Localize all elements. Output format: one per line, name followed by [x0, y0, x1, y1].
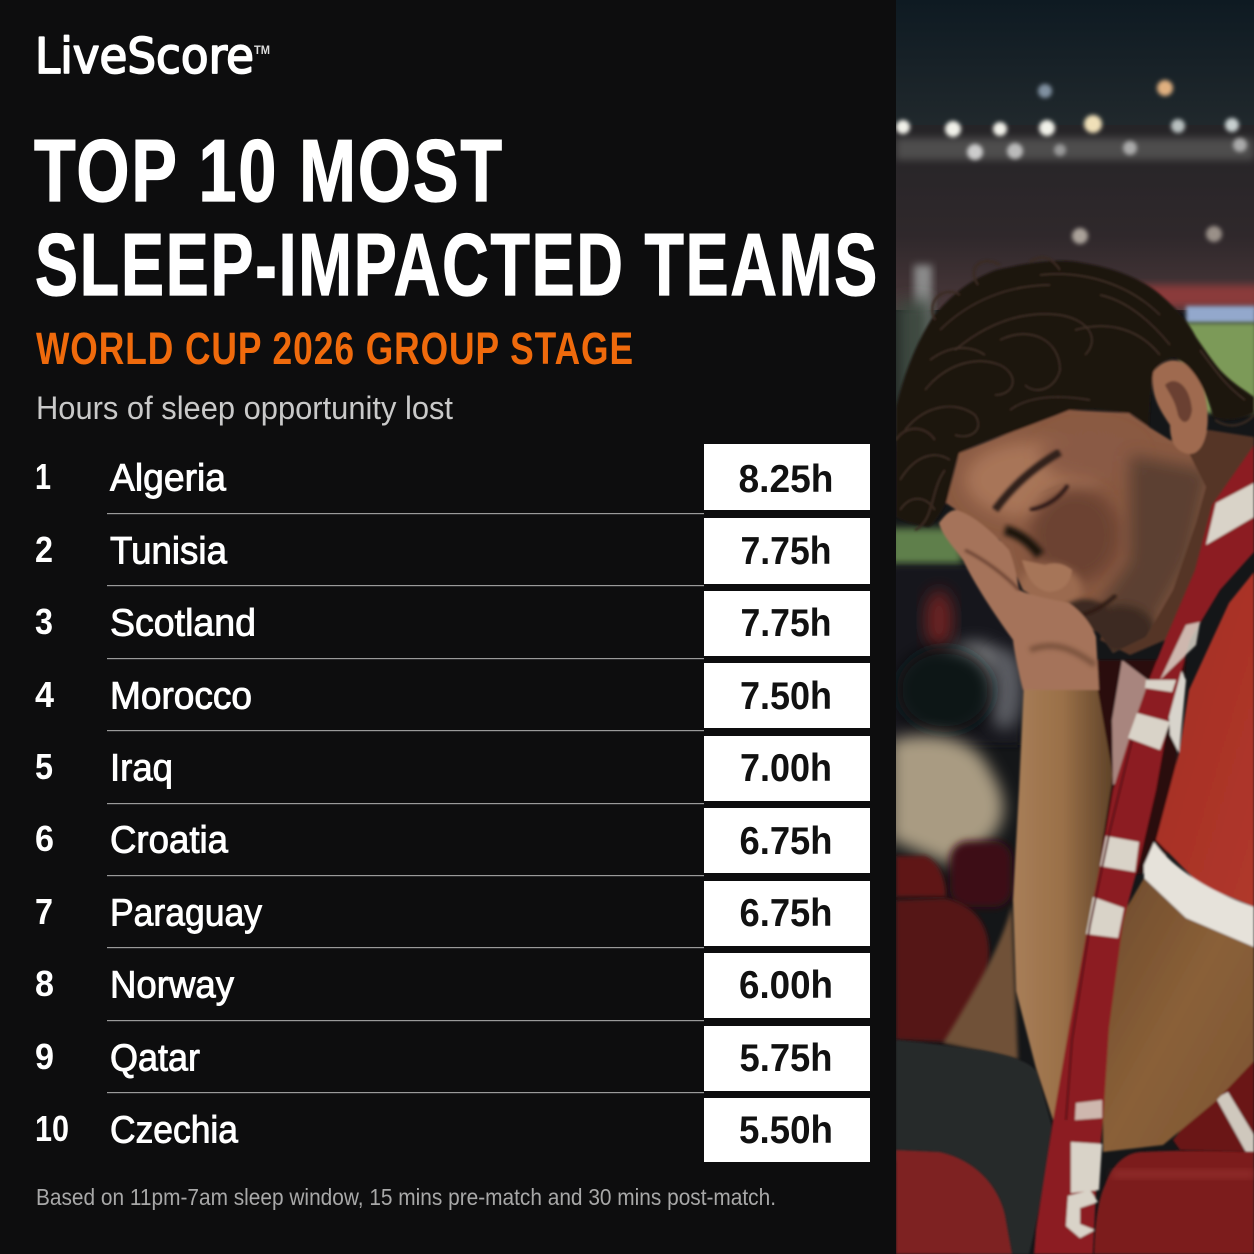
- row 6: Croatia: 6.75h: [740, 820, 832, 863]
- red seats: [950, 841, 1012, 907]
- row 9: Qatar: Qatar: [110, 1038, 200, 1080]
- back scarf strand: [1112, 660, 1148, 785]
- row 3: Scotland: Scotland: [110, 602, 256, 644]
- dark trousers: [896, 1040, 1052, 1254]
- hair: [896, 261, 1254, 527]
- row 9: Qatar: [35, 1026, 870, 1093]
- stadium photo: tired fan: [890, 0, 1254, 1254]
- beige jacket: [890, 735, 1004, 865]
- row 2: Tunisia: [35, 518, 870, 586]
- neck: [1100, 430, 1254, 655]
- row 3: Scotland: 7.75h: [740, 602, 832, 645]
- scarf white stripes: [1066, 483, 1254, 1238]
- row 6: Croatia: [35, 808, 870, 876]
- row 9: Qatar: 5.75h: [740, 1037, 832, 1080]
- row 2: Tunisia: 2: [35, 529, 53, 570]
- background leg: [943, 905, 1018, 1060]
- row 4: Morocco: 4: [35, 674, 54, 715]
- row 1: Algeria: Algeria: [110, 458, 227, 500]
- shadow behind arm and shirt: [1096, 660, 1186, 880]
- row 1: Algeria: [35, 444, 870, 514]
- seat front left: [896, 1150, 1012, 1254]
- row 5: Iraq: 7.00h: [740, 747, 832, 790]
- row 8: Norway: [35, 953, 870, 1021]
- row 7: Paraguay: [35, 881, 870, 948]
- blurred crowd: [896, 560, 965, 571]
- upper arm: [1103, 878, 1254, 1152]
- row 7: Paraguay: 7: [35, 891, 53, 932]
- title: TOP 10 MOST: [34, 121, 504, 220]
- row 4: Morocco: [35, 663, 870, 731]
- row 4: Morocco: Morocco: [110, 676, 252, 718]
- row 8: Norway: Norway: [110, 964, 234, 1006]
- row 1: Algeria: 1: [35, 456, 51, 497]
- row 6: Croatia: 6: [35, 818, 54, 859]
- scarf: [1034, 445, 1254, 1254]
- logo: LiveScore: LiveScore: [35, 28, 254, 85]
- ranking table: [35, 444, 870, 1162]
- footnote: Based on 11pm-7am sleep window, 15 mins pre-match and 30 mins post-match.: [36, 1184, 776, 1210]
- chart caption: Hours of sleep opportunity lost: [36, 390, 453, 426]
- subtitle: WORLD CUP 2026 GROUP STAGE: [36, 323, 634, 374]
- hand: [939, 510, 1099, 690]
- row 5: Iraq: Iraq: [110, 748, 173, 790]
- row 10: Czechia: 5.50h: [739, 1109, 833, 1152]
- seat front right: [1094, 1150, 1254, 1254]
- row 1: Algeria: 8.25h: [738, 458, 834, 501]
- row 6: Croatia: Croatia: [110, 820, 229, 862]
- row 10: Czechia: 10: [35, 1108, 69, 1149]
- row 2: Tunisia: 7.75h: [740, 530, 832, 573]
- fan figure: [896, 257, 1254, 1254]
- logo: LiveScore: TM: [254, 43, 270, 57]
- row 3: Scotland: 3: [35, 601, 53, 642]
- row 9: Qatar: 9: [35, 1036, 54, 1077]
- lower back scarf strand: [1173, 1060, 1254, 1152]
- stadium background: [890, 0, 1254, 1254]
- row 8: Norway: 6.00h: [739, 964, 833, 1007]
- row 7: Paraguay: 6.75h: [740, 892, 832, 935]
- row 5: Iraq: 5: [35, 746, 53, 787]
- title: SLEEP-IMPACTED TEAMS: [35, 215, 879, 314]
- row 10: Czechia: [35, 1098, 870, 1162]
- row 7: Paraguay: Paraguay: [110, 892, 262, 934]
- forearm: [1013, 680, 1113, 1120]
- shirt collar: [1168, 660, 1186, 753]
- ear: [1152, 360, 1208, 454]
- red shirt: [1156, 572, 1254, 907]
- row 4: Morocco: 7.50h: [740, 675, 832, 718]
- face: [944, 408, 1206, 654]
- shirt white trim: [1144, 842, 1254, 947]
- row 2: Tunisia: Tunisia: [110, 530, 228, 572]
- row 5: Iraq: [35, 736, 870, 804]
- row 3: Scotland: [35, 591, 870, 659]
- row 10: Czechia: Czechia: [110, 1110, 239, 1152]
- row 8: Norway: 8: [35, 963, 54, 1004]
- title: [34, 121, 879, 314]
- brow, eye, nose and mouth: [995, 452, 1060, 510]
- hair strands: [900, 274, 1245, 510]
